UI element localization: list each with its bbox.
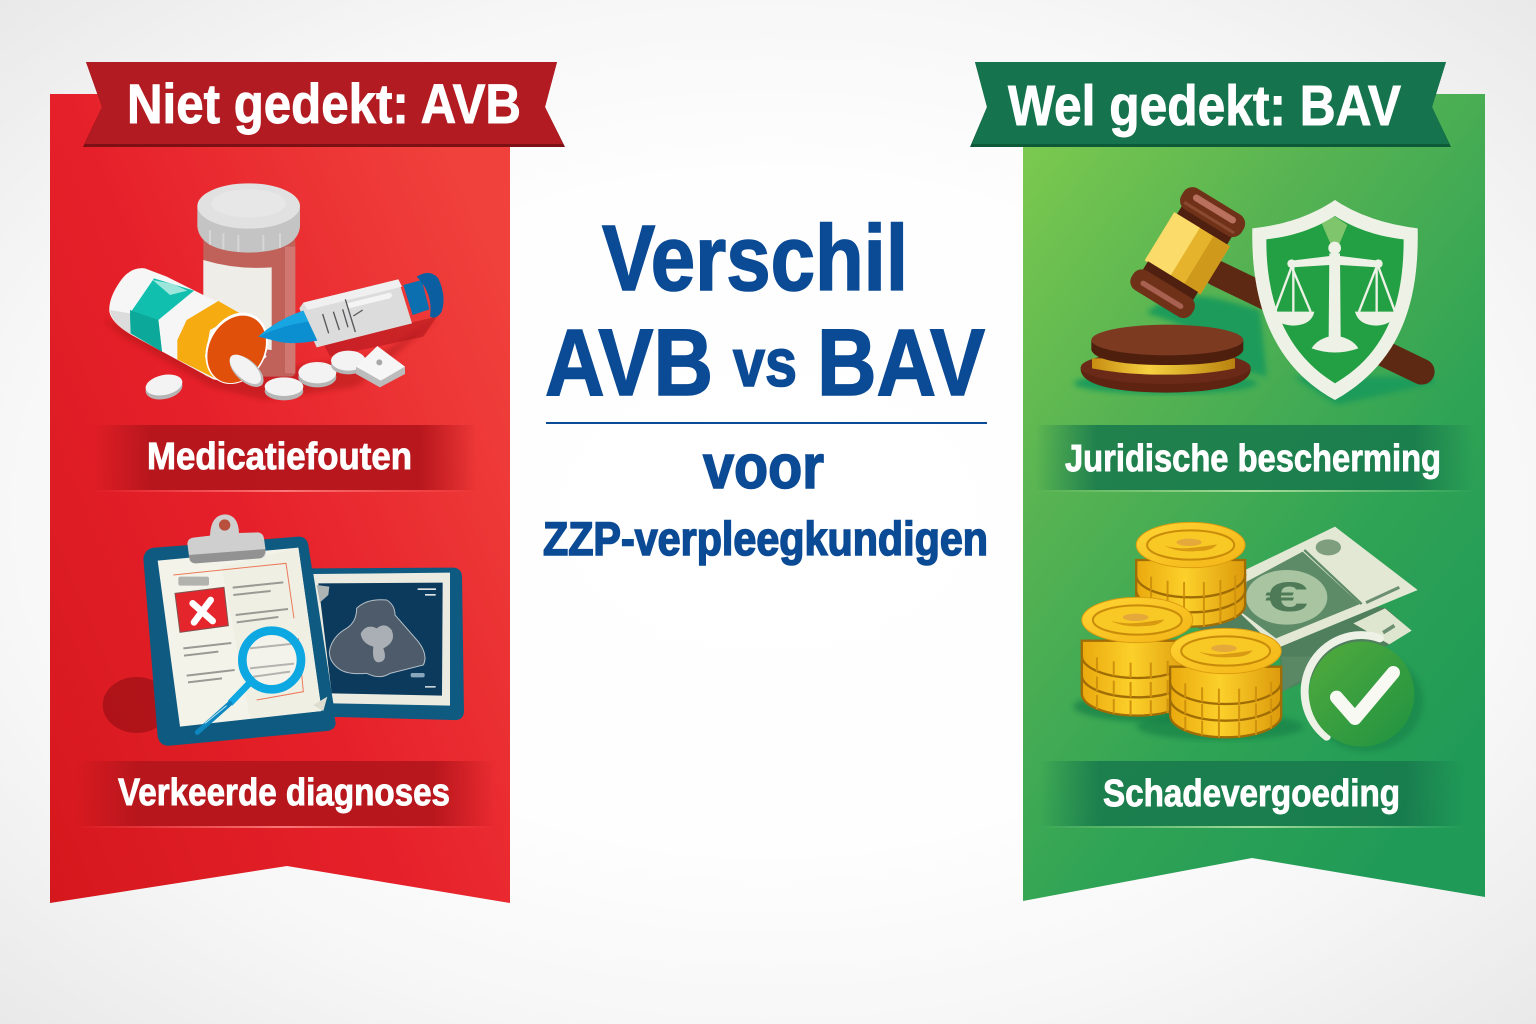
heading: AVB vs BAV: BAV xyxy=(817,310,985,416)
icon: medication bottles and syringe xyxy=(103,183,444,403)
red banner body xyxy=(50,94,510,903)
icon: coins, banknotes and check mark: € xyxy=(1265,573,1308,620)
ribbon: Wel gedekt: BAV xyxy=(970,62,1451,147)
ribbon: Niet gedekt: AVB xyxy=(83,62,565,147)
label band: Juridische bescherming: Juridische bescherming xyxy=(1065,438,1441,480)
icon: clipboard with wrong diagnosis and scan xyxy=(103,514,464,746)
label band: Verkeerde diagnoses: Verkeerde diagnoses xyxy=(118,772,450,814)
heading: AVB vs BAV xyxy=(545,310,985,416)
heading: AVB vs BAV: AVB xyxy=(545,310,713,416)
label band: Medicatiefouten xyxy=(93,425,477,492)
green banner body xyxy=(1023,94,1485,901)
icon: gavel and shield with scales xyxy=(1074,183,1435,405)
label band: Verkeerde diagnoses xyxy=(75,761,495,828)
subheading: ZZP-verpleegkundigen: ZZP-verpleegkundigen xyxy=(543,512,988,565)
panel: niet gedekt AVB xyxy=(50,62,565,903)
ribbon: Niet gedekt: AVB: Niet gedekt: AVB xyxy=(127,72,521,135)
heading: Verschil: Verschil xyxy=(602,206,908,310)
title block xyxy=(543,206,988,565)
icon: coins, banknotes and check mark xyxy=(1073,522,1423,752)
subheading: voor: voor xyxy=(703,433,824,502)
ribbon: Wel gedekt: BAV: Wel gedekt: BAV xyxy=(1008,74,1401,138)
label band: Juridische bescherming xyxy=(1035,425,1475,492)
label band: Medicatiefouten: Medicatiefouten xyxy=(147,436,412,478)
label band: Schadevergoeding xyxy=(1040,761,1465,828)
panel: wel gedekt BAV xyxy=(970,62,1485,901)
heading: AVB vs BAV: vs xyxy=(733,325,797,401)
label band: Schadevergoeding: Schadevergoeding xyxy=(1103,773,1400,815)
